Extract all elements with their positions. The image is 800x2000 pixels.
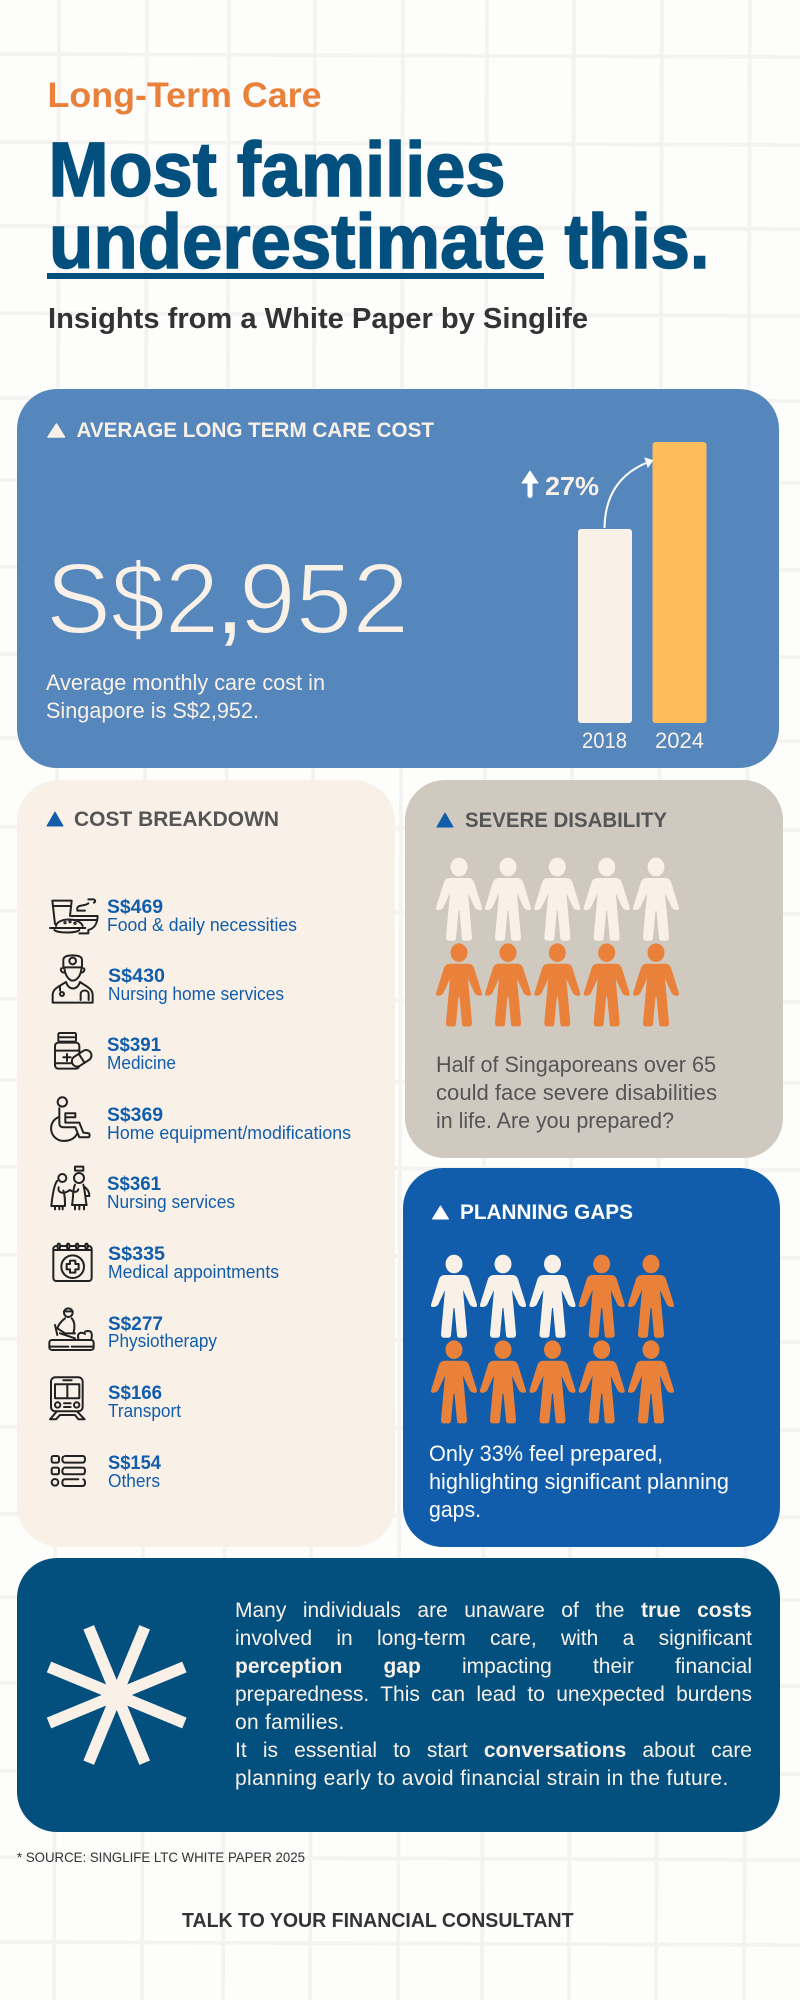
description <box>436 1052 717 1133</box>
label: Food & daily necessities <box>107 915 297 935</box>
message text: perception gap impacting their financial <box>235 1655 752 1678</box>
pictogram: three of ten people prepared <box>431 1255 674 1423</box>
value: S$166 <box>108 1382 162 1404</box>
icon: calendar <box>53 1244 92 1281</box>
item: home equipment <box>51 1097 351 1143</box>
description: gaps. <box>429 1497 481 1522</box>
label: Nursing home services <box>108 984 284 1004</box>
label: Home equipment/modifications <box>107 1123 351 1143</box>
subtitle kicker: Long-Term Care: Long-Term Care <box>48 76 322 115</box>
item: transport <box>50 1377 181 1421</box>
icon: physiotherapy <box>49 1308 94 1350</box>
icon: triangle bullet <box>47 812 63 826</box>
icon: asterisk <box>49 1627 184 1763</box>
title block <box>47 76 710 335</box>
panel: cost breakdown <box>17 780 395 1547</box>
big number: S$2 <box>46 543 219 655</box>
bar chart: 2018 vs 2024 <box>522 442 706 753</box>
growth value: 27% <box>545 471 599 501</box>
tagline: Insights from a White Paper by Singlife <box>48 303 588 335</box>
value: S$277 <box>108 1313 163 1335</box>
panel heading: PLANNING GAPS <box>460 1200 633 1224</box>
label: Others <box>108 1471 160 1491</box>
icon: triangle bullet <box>437 813 453 827</box>
call to action: TALK TO YOUR FINANCIAL CONSULTANT <box>182 1910 574 1932</box>
label: Medical appointments <box>108 1262 279 1282</box>
label: Physiotherapy <box>108 1331 217 1351</box>
caption: Average monthly care cost in <box>46 670 325 695</box>
icon: food <box>50 899 98 933</box>
panel heading: SEVERE DISABILITY <box>465 808 667 832</box>
source note: * SOURCE: SINGLIFE LTC WHITE PAPER 2025 <box>17 1849 305 1865</box>
bar 2024 <box>652 442 706 723</box>
icon: triangle bullet <box>48 424 64 437</box>
icon: up arrow <box>522 471 538 498</box>
icon: wheelchair <box>51 1097 90 1141</box>
description <box>429 1441 729 1522</box>
item: medical appointments <box>53 1243 279 1282</box>
bar 2018 <box>578 529 632 723</box>
icon: list <box>52 1456 85 1486</box>
item: medicine <box>55 1033 176 1073</box>
item: nursing home <box>53 955 284 1004</box>
main title line 1: Most families <box>48 127 506 213</box>
icon: medicine <box>55 1033 94 1069</box>
message text: Many individuals are unaware of the true costs <box>235 1599 752 1622</box>
main title line 2: underestimate <box>49 199 545 285</box>
panel: average long term care cost <box>17 389 779 768</box>
value: S$361 <box>107 1173 161 1195</box>
panel: key message <box>17 1558 780 1832</box>
description: highlighting significant planning <box>429 1469 729 1494</box>
label: Medicine <box>107 1053 176 1073</box>
big number: , <box>216 543 244 655</box>
item: physiotherapy <box>49 1308 217 1351</box>
message text: involved in long-term care, with a significant <box>235 1627 752 1650</box>
big number: 952 <box>239 543 409 655</box>
big number <box>46 543 409 655</box>
label 2018: 2018 <box>582 728 627 753</box>
description: in life. Are you prepared? <box>436 1108 674 1133</box>
value: S$154 <box>108 1452 161 1474</box>
value: S$369 <box>107 1104 163 1126</box>
panel: planning gaps <box>403 1168 780 1547</box>
value: S$335 <box>108 1243 165 1265</box>
value: S$430 <box>108 965 165 987</box>
message text: on families. <box>235 1711 345 1734</box>
panel: severe disability <box>405 780 783 1158</box>
description: Only 33% feel prepared, <box>429 1441 663 1466</box>
item: nursing services <box>51 1167 235 1212</box>
icon: triangle bullet <box>432 1206 448 1219</box>
description: could face severe disabilities <box>436 1080 717 1105</box>
label: Transport <box>108 1401 181 1421</box>
message text: preparedness. This can lead to unexpected burdens <box>235 1683 752 1706</box>
icon: nurse with patient <box>51 1167 89 1209</box>
caption: Singapore is S$2,952. <box>46 698 259 723</box>
item: food <box>50 896 297 935</box>
description: Half of Singaporeans over 65 <box>436 1052 716 1077</box>
curved arrow <box>604 458 652 528</box>
panel heading: COST BREAKDOWN <box>74 807 279 831</box>
message text: It is essential to start conversations about care <box>235 1739 752 1762</box>
caption <box>46 670 325 723</box>
icon: nurse <box>53 955 93 1003</box>
item: others <box>52 1452 161 1491</box>
value: S$391 <box>107 1034 161 1056</box>
title underline <box>47 273 544 279</box>
value: S$469 <box>107 896 163 918</box>
panel heading: AVERAGE LONG TERM CARE COST <box>76 418 434 442</box>
pictogram: five of ten people highlighted <box>436 858 679 1026</box>
label 2024: 2024 <box>655 728 704 753</box>
label: Nursing services <box>107 1192 235 1212</box>
main title line 2 end: this. <box>564 199 710 285</box>
message text <box>235 1597 755 1793</box>
icon: train <box>50 1377 85 1419</box>
message text: planning early to avoid financial strain in the future. <box>235 1767 729 1790</box>
